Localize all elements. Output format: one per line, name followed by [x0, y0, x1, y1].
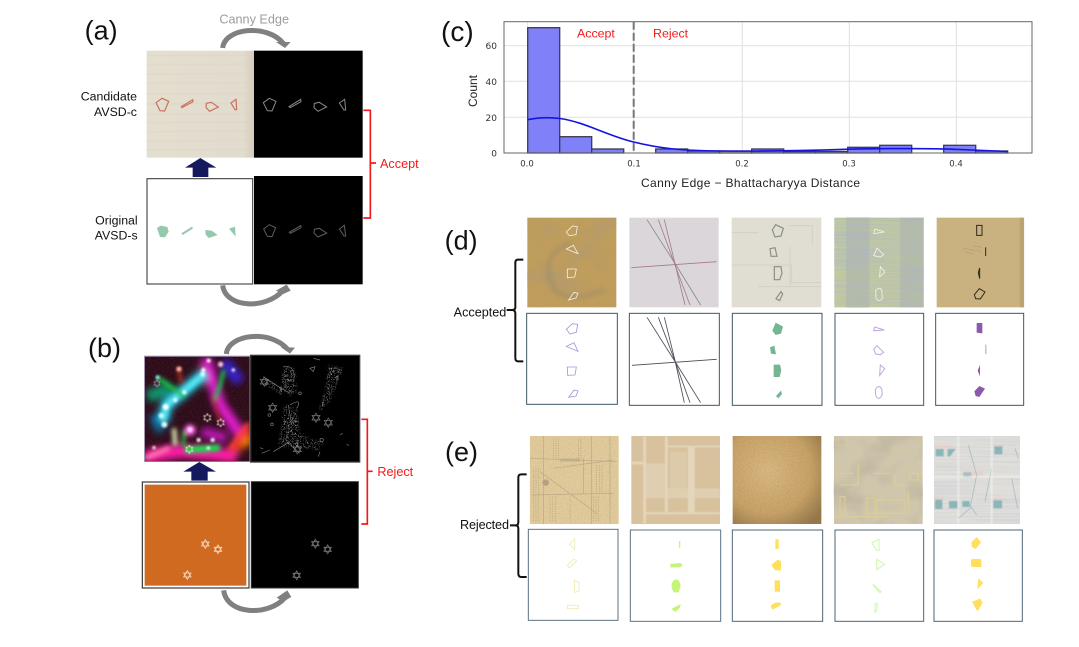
histogram bars	[528, 28, 1008, 153]
heading: (b): (b)	[88, 333, 121, 363]
y axis ticks: 0	[491, 150, 497, 160]
image: rejected 1 source	[528, 529, 618, 620]
label: Candidate AVSD-c	[81, 90, 137, 119]
threshold line	[633, 22, 635, 153]
panel: (d) accepted samples left	[445, 218, 719, 405]
image: rejected 4 render	[834, 436, 923, 524]
y axis ticks: 60	[486, 42, 497, 52]
x axis ticks	[520, 160, 963, 170]
image: accepted 2 source	[629, 313, 719, 405]
image: rejected 5 source	[934, 530, 1022, 621]
panel: (d) accepted samples right	[732, 218, 1024, 405]
chart: histogram of distances	[466, 22, 1032, 190]
x axis ticks: 0.3	[842, 160, 856, 170]
image: rejected 5 render	[934, 436, 1020, 524]
y axis title: Count	[466, 74, 480, 107]
x axis title: Canny Edge − Bhattacharyya Distance	[641, 176, 860, 190]
bracket: accepted	[507, 260, 523, 361]
KDE curve	[528, 118, 1008, 152]
image: rejected 3 source	[732, 530, 823, 621]
image: accepted 1 render	[527, 218, 616, 307]
image: accepted 4 render	[834, 218, 924, 307]
image: original canny edges	[251, 482, 358, 588]
bracket: rejected	[510, 474, 527, 577]
image: rejected 2 render	[631, 436, 720, 524]
x axis ticks: 0.2	[735, 160, 749, 170]
image: accepted 2 render	[629, 218, 719, 307]
panel: (e) rejected samples left	[445, 436, 721, 621]
heading: (d): (d)	[445, 226, 478, 256]
panel: (a) canny edge accept	[81, 12, 419, 304]
image: original canny edges	[254, 176, 363, 284]
panel: (c) histogram	[441, 16, 1032, 190]
arrow: up blue	[183, 462, 216, 481]
arrow: up blue	[185, 158, 216, 177]
arrow: top curved canny	[223, 30, 291, 48]
bracket: accept	[363, 110, 376, 218]
image: candidate psychedelic	[144, 356, 251, 462]
image: rejected 1 render	[530, 436, 619, 524]
label: Rejected: Rejected	[460, 518, 509, 532]
panel: (e) rejected samples right	[732, 436, 1022, 621]
heading: (e): (e)	[445, 437, 478, 467]
image: accepted 3 render	[732, 218, 821, 307]
y axis ticks: 20	[486, 114, 497, 124]
image: candidate canny edges	[251, 355, 360, 462]
arrow: bottom curved canny	[223, 285, 291, 304]
panel: (b) canny edge reject	[88, 333, 414, 611]
y axis ticks	[486, 42, 497, 160]
image: rejected 3 render	[733, 436, 821, 524]
x axis ticks: 0.1	[627, 160, 641, 170]
bracket: reject	[361, 419, 373, 524]
arrow: top curved canny	[226, 336, 295, 354]
image: candidate canny edges	[254, 51, 363, 158]
image: accepted 4 source	[835, 313, 924, 405]
image: original orange	[142, 482, 249, 588]
x axis ticks: 0.0	[520, 160, 534, 170]
label: Candidate AVSD-c: Candidate	[81, 90, 137, 104]
label: Reject: Reject	[653, 27, 689, 41]
label: Reject: Reject	[377, 465, 414, 479]
label: Original AVSD-s: Original	[95, 213, 138, 227]
image: accepted 3 source	[732, 313, 822, 405]
heading: (c): (c)	[441, 16, 474, 47]
image: candidate AVSD-c	[147, 51, 254, 158]
image: accepted 5 source	[936, 313, 1024, 405]
y axis ticks: 40	[486, 78, 497, 88]
heading: (a): (a)	[85, 16, 118, 46]
label: Original AVSD-s: AVSD-s	[95, 228, 138, 242]
image: rejected 2 source	[630, 530, 721, 621]
image: accepted 5 render	[937, 218, 1024, 307]
label: Candidate AVSD-c: AVSD-c	[94, 105, 137, 119]
label: Canny Edge: Canny Edge	[219, 12, 289, 26]
label: Accept: Accept	[380, 157, 419, 171]
image: accepted 1 source	[527, 313, 617, 404]
arrow: bottom curved canny	[224, 590, 291, 611]
label: Accepted: Accepted	[454, 306, 506, 320]
label: Accept: Accept	[577, 27, 615, 41]
label: Original AVSD-s	[95, 213, 138, 242]
x axis ticks: 0.4	[949, 160, 963, 170]
image: rejected 4 source	[835, 530, 924, 621]
image: original AVSD-s	[147, 179, 253, 284]
